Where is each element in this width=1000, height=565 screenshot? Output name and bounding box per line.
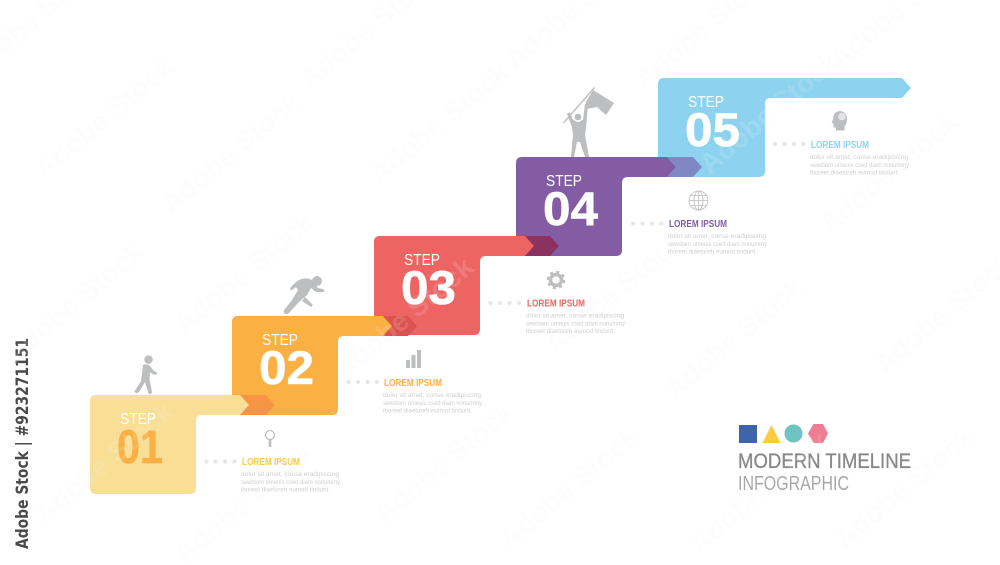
step 5 block: STEP [688,94,724,111]
icon: globe [689,191,708,210]
watermark: Adobe Stock [328,251,480,385]
label: step 1 text: LOREM IPSUM [242,457,300,468]
step 4 block: 04 [543,182,598,235]
watermark: Adobe Stock [658,271,810,405]
label: step 1 text: dolor sit amet, conse eradipiscing [241,471,339,478]
watermark: Adobe Stock [28,51,180,185]
step 2 block: 02 [259,341,314,394]
icon: bar chart [406,350,421,368]
step 4 block [516,157,702,256]
subheading: infographic: INFOGRAPHIC [738,473,849,495]
label: step 2 text: dolor sit amet, conse eradipiscing [383,392,481,399]
step 5 block [658,78,911,177]
heading: modern timeline: MODERN TIMELINE [738,450,911,473]
watermark: Adobe Stock [363,56,515,190]
step 2 block: STEP [262,332,298,349]
label: step 5 text [773,140,910,176]
step 3 block [374,236,559,335]
step 5 block: 05 [685,103,740,156]
watermark: Adobe Stock [493,421,645,555]
logo shapes [739,424,828,443]
label: step 5 text: iboreet diaeloreh eumod tindunt. [810,170,899,176]
label: step 4 text: LOREM IPSUM [669,219,727,230]
icon: magnifier [266,430,274,447]
label: step 4 text: iboreet diaeloreh eumod tindunt. [668,248,757,256]
label: step 5 text: sewdiam umeuis csed diam nonummy [810,162,910,169]
label: step 5 text: dolor sit amet, conse eradipiscing [810,154,908,161]
label: step 3 text: sewdiam umeuis csed diam nonummy [526,320,626,328]
label: step 3 text: LOREM IPSUM [527,298,585,310]
watermark: Adobe Stock [683,426,835,560]
label: step 5 text: LOREM IPSUM [811,140,869,151]
label: step 2 text [346,378,483,414]
label: step 1 text [204,457,341,494]
stock id label: Adobe Stock | #923271151 [13,338,33,549]
label: step 2 text: LOREM IPSUM [384,378,442,389]
step 1 block [90,395,275,494]
icon: person with flag [563,87,614,157]
label: step 3 text: dolor sit amet, conse eradipiscing [526,312,624,320]
watermark: Adobe Stock [828,421,980,555]
watermark: Adobe Stock [168,206,320,340]
step 2 block [232,316,417,415]
step 1 block: STEP [120,411,156,428]
step 3 block: STEP [404,252,440,269]
label: step 1 text: iboreet diaeloreh eumod tindunt. [241,486,330,494]
label: step 2 text: sewdiam umeuis csed diam nonummy [383,400,483,407]
watermark: Adobe Stock [368,396,520,530]
label: step 3 text [488,298,626,335]
step 4 block: STEP [546,173,582,190]
icon: gear [548,272,564,288]
icon: walking person [135,355,157,394]
step 3 block: 03 [401,261,456,314]
icon: head [832,111,847,130]
label: step 2 text: iboreet diaeloreh eumod tindunt. [383,408,472,414]
label: step 4 text [631,219,768,256]
watermark: Adobe Stock [0,236,150,370]
label: step 4 text: sewdiam umeuis csed diam nonummy [668,241,768,248]
label: step 1 text: sewdiam umeuis csed diam nonummy [241,479,341,486]
watermark: Adobe Stock [538,226,690,360]
watermark: Adobe Stock [813,106,965,240]
step 1 block: 01 [117,420,163,473]
watermark: Adobe Stock [693,46,845,180]
watermark: Adobe Stock [28,396,180,530]
icon: running person [284,276,324,314]
label: step 4 text: dolor sit amet, conse eradipiscing [668,233,766,240]
watermark: Adobe Stock [155,86,307,220]
label: step 3 text: iboreet diaeloreh eumod tindunt. [526,328,615,335]
